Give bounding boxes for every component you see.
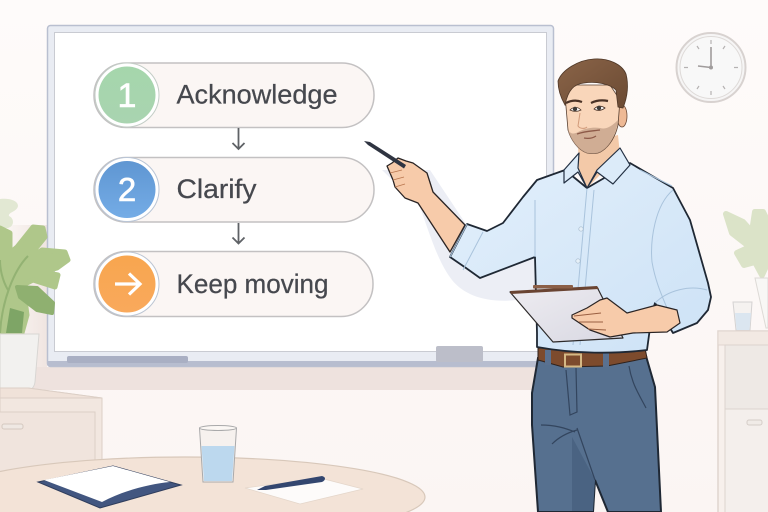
presenter — [364, 59, 711, 512]
mouth — [577, 130, 600, 138]
arrow 1 — [232, 128, 244, 149]
arm shadow on whiteboard — [382, 170, 537, 301]
step 2: Clarify: 2 — [118, 171, 136, 208]
step 3: Keep moving: Keep moving — [176, 269, 328, 299]
left pot — [0, 334, 39, 392]
shirt details — [450, 170, 707, 345]
left plant — [0, 199, 68, 333]
neck — [578, 135, 620, 188]
fingers — [390, 170, 405, 187]
whiteboard shadow band — [0, 225, 540, 395]
icon: arrow right — [115, 274, 140, 294]
face — [565, 85, 620, 154]
left cabinet — [0, 388, 102, 472]
ear — [617, 105, 627, 127]
whiteboard — [48, 26, 554, 366]
right fingers — [574, 313, 606, 330]
right glass — [733, 302, 752, 330]
marker tray item — [67, 356, 188, 363]
paper and pen — [245, 476, 363, 504]
beard — [568, 120, 618, 154]
step 2: Clarify — [94, 158, 374, 222]
step 3: Keep moving — [94, 252, 373, 316]
left arm and hand — [387, 158, 465, 252]
pointer pen — [364, 141, 406, 168]
trousers — [532, 356, 661, 512]
right cabinet — [718, 331, 768, 512]
collar — [564, 148, 630, 188]
nose — [578, 113, 587, 128]
belt — [538, 348, 647, 367]
step flow — [94, 63, 374, 316]
step 2: Clarify: Clarify — [176, 174, 257, 204]
clock — [676, 33, 746, 102]
clipboard — [510, 285, 623, 342]
water glass — [200, 426, 236, 482]
hair — [558, 59, 627, 108]
shirt — [450, 163, 711, 353]
right plant — [726, 212, 768, 328]
step 1: Acknowledge: Acknowledge — [176, 80, 338, 110]
round table — [0, 457, 425, 512]
eraser — [436, 346, 483, 362]
right hand and forearm — [572, 298, 680, 337]
notebook — [38, 466, 181, 508]
arrow 2 — [232, 223, 244, 244]
step 1: Acknowledge — [94, 63, 374, 128]
step 1: Acknowledge: 1 — [118, 77, 136, 115]
eyes and brows — [566, 100, 608, 112]
